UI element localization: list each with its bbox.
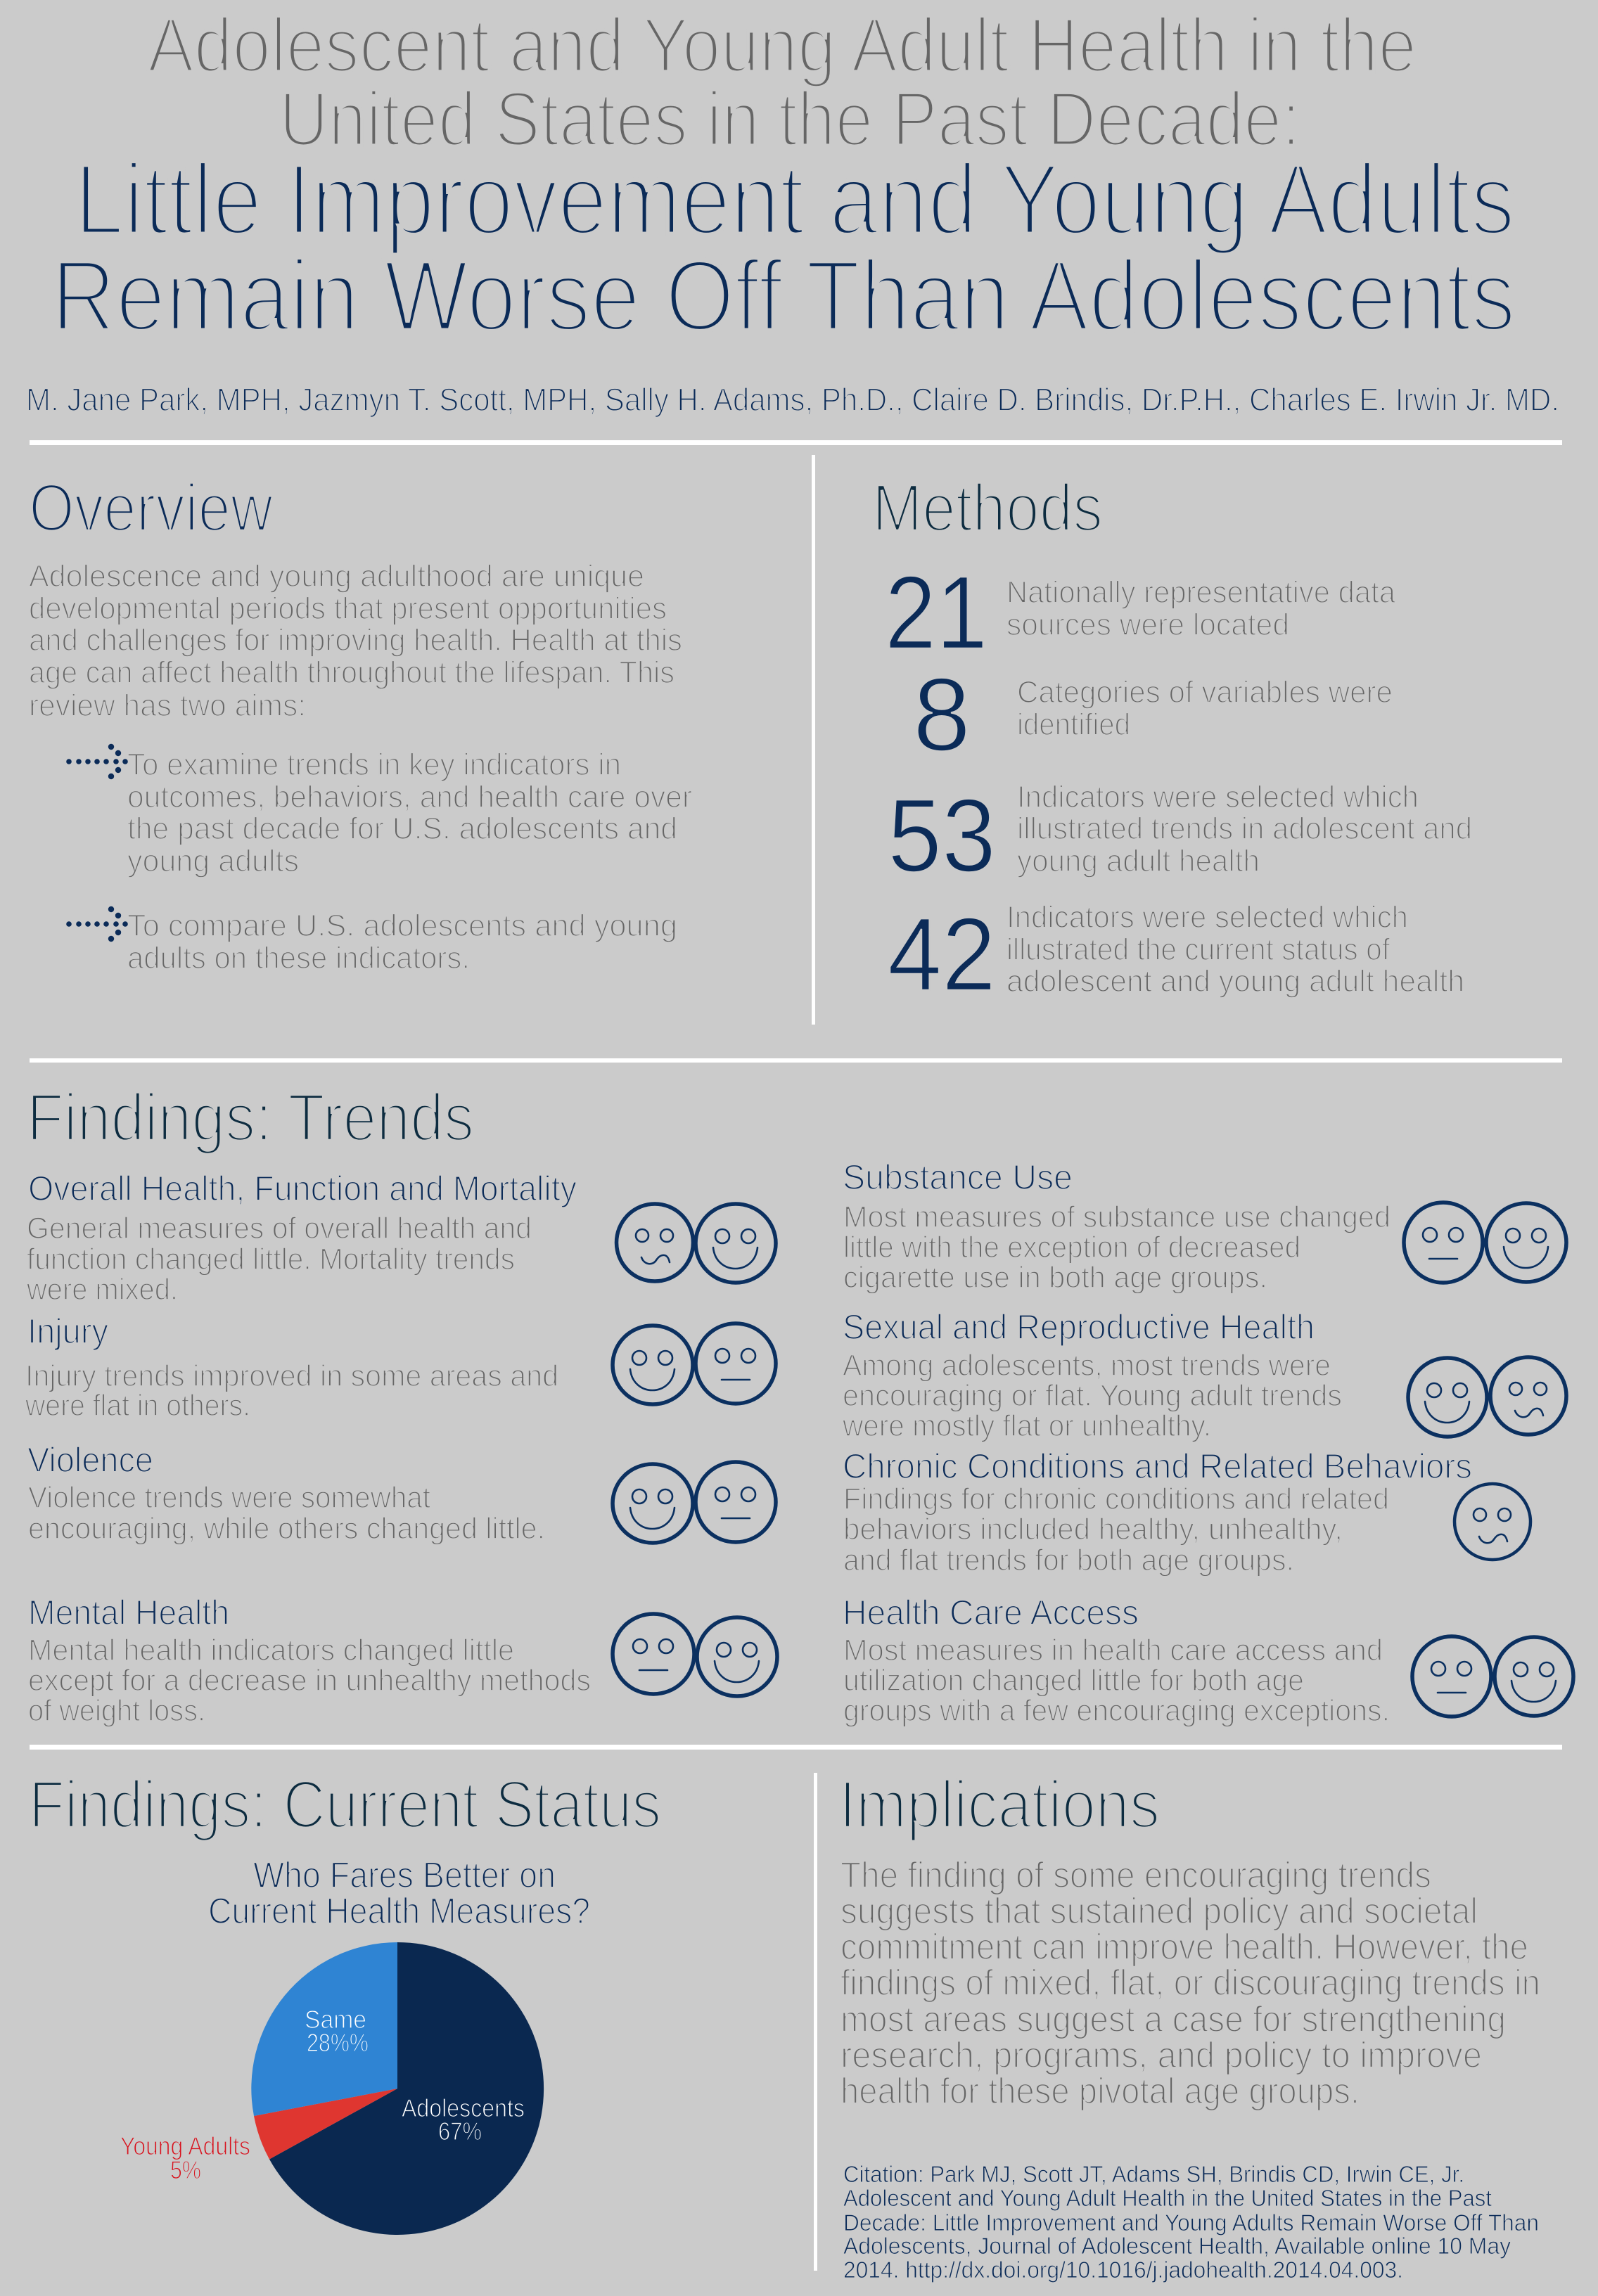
title: navy main bbox=[51, 143, 1516, 352]
slice: adolescents 67% bbox=[269, 1942, 544, 2235]
panel: overview bbox=[29, 470, 692, 975]
stat descriptions: Indicators were selected which bbox=[1006, 900, 1408, 935]
stat numbers bbox=[885, 555, 996, 1013]
text: mental health: Mental health indicators changed little bbox=[28, 1634, 514, 1667]
icon: happy face bbox=[1408, 1358, 1487, 1437]
text: injury bbox=[25, 1359, 558, 1423]
text: violence: Violence trends were somewhat bbox=[28, 1481, 430, 1515]
heading: methods: Methods bbox=[872, 470, 1103, 546]
text: chronic conditions: Findings for chronic conditions and related bbox=[843, 1482, 1389, 1516]
icon: happy face bbox=[613, 1326, 693, 1404]
text: violence bbox=[28, 1481, 545, 1546]
stat descriptions: illustrated the current status of bbox=[1006, 932, 1391, 967]
aim 2 text: adults on these indicators. bbox=[127, 941, 470, 975]
slice: young adults 5% bbox=[254, 2089, 397, 2159]
text: sexual and reproductive health: Among adolescents, most trends were bbox=[843, 1349, 1331, 1383]
implications paragraph bbox=[840, 1855, 1540, 2112]
label: same bbox=[305, 2005, 369, 2057]
icon: neutral face bbox=[696, 1462, 776, 1542]
citation: Citation: Park MJ, Scott JT, Adams SH, Brindis CD, Irwin CE, Jr. bbox=[843, 2161, 1464, 2187]
title: grey lead bbox=[148, 2, 1417, 162]
panel: findings current status bbox=[29, 1767, 661, 2235]
text: health care access: Most measures in health care access and bbox=[843, 1634, 1383, 1667]
implications paragraph: The finding of some encouraging trends bbox=[840, 1855, 1431, 1896]
icon: happy face bbox=[697, 1617, 777, 1696]
label: young adults bbox=[120, 2131, 250, 2184]
panel: findings trends bbox=[25, 1080, 1573, 1728]
text: overall health: General measures of overall health and bbox=[27, 1212, 532, 1245]
text: mental health: of weight loss. bbox=[28, 1694, 205, 1728]
implications paragraph: suggests that sustained policy and societal bbox=[840, 1891, 1478, 1932]
label: young adults: 5% bbox=[170, 2155, 201, 2184]
stat descriptions: sources were located bbox=[1006, 608, 1289, 642]
stat numbers: 53 bbox=[888, 778, 996, 894]
stat descriptions: Categories of variables were bbox=[1017, 675, 1393, 710]
citation: Adolescents, Journal of Adolescent Health, Available online 10 May bbox=[843, 2233, 1511, 2259]
text: health care access bbox=[843, 1634, 1390, 1728]
stat descriptions: Nationally representative data bbox=[1006, 575, 1395, 610]
citation: 2014. http://dx.doi.org/10.1016/j.jadohealth.2014.04.003. bbox=[843, 2257, 1403, 2283]
icon: sad face bbox=[1490, 1357, 1566, 1435]
panel: implications bbox=[839, 1767, 1540, 2283]
text: substance use bbox=[843, 1200, 1391, 1295]
subheading: substance use: Substance Use bbox=[843, 1157, 1073, 1197]
text: overall health: function changed little. Mortality trends bbox=[27, 1243, 515, 1276]
stat numbers: 8 bbox=[913, 657, 971, 773]
icon: wavy face bbox=[616, 1204, 693, 1281]
text: injury: Injury trends improved in some areas and bbox=[25, 1359, 558, 1393]
overview paragraph: age can affect health throughout the lifespan. This bbox=[29, 655, 675, 690]
stat descriptions: young adult health bbox=[1017, 844, 1260, 878]
icon: happy face bbox=[696, 1204, 776, 1283]
implications paragraph: most areas suggest a case for strengthening bbox=[840, 1999, 1506, 2040]
text: mental health: except for a decrease in unhealthy methods bbox=[28, 1664, 591, 1698]
chart title bbox=[208, 1855, 590, 1932]
text: overall health: were mixed. bbox=[26, 1273, 178, 1307]
chart title: Current Health Measures? bbox=[208, 1891, 590, 1932]
icon: happy face bbox=[613, 1464, 693, 1543]
stat descriptions bbox=[1006, 575, 1472, 999]
title bbox=[51, 2, 1516, 352]
title: grey lead: United States in the Past Decade: bbox=[279, 76, 1300, 162]
text: chronic conditions bbox=[843, 1482, 1389, 1577]
stat numbers: 42 bbox=[888, 897, 996, 1013]
subheading: chronic conditions: Chronic Conditions and Related Behaviors bbox=[843, 1447, 1472, 1486]
text: mental health bbox=[28, 1634, 591, 1728]
title: grey lead: Adolescent and Young Adult Health in the bbox=[148, 2, 1417, 89]
text: substance use: cigarette use in both age groups. bbox=[843, 1261, 1267, 1295]
label: adolescents: Adolescents bbox=[402, 2093, 525, 2122]
subheading: injury: Injury bbox=[27, 1311, 108, 1351]
text: injury: were flat in others. bbox=[25, 1389, 250, 1423]
subheading: health care access: Health Care Access bbox=[843, 1593, 1139, 1632]
aim 1 text: young adults bbox=[127, 844, 299, 878]
aim 2 text: To compare U.S. adolescents and young bbox=[127, 909, 677, 943]
text: substance use: Most measures of substance use changed bbox=[843, 1200, 1391, 1234]
label: same: 28%% bbox=[307, 2028, 369, 2057]
icon: neutral face bbox=[1404, 1202, 1483, 1283]
implications paragraph: health for these pivotal age groups. bbox=[840, 2071, 1360, 2112]
text: sexual and reproductive health: encouraging or flat. Young adult trends bbox=[843, 1379, 1342, 1413]
implications paragraph: research, programs, and policy to improve bbox=[840, 2035, 1482, 2076]
text: substance use: little with the exception of decreased bbox=[843, 1231, 1300, 1264]
subheading: sexual and reproductive health: Sexual and Reproductive Health bbox=[843, 1307, 1315, 1347]
subheading: mental health: Mental Health bbox=[28, 1593, 229, 1632]
text: sexual and reproductive health: were mostly flat or unhealthy. bbox=[842, 1409, 1211, 1443]
stat descriptions: adolescent and young adult health bbox=[1006, 964, 1464, 999]
citation: Decade: Little Improvement and Young Adults Remain Worse Off Than bbox=[843, 2210, 1539, 2236]
overview paragraph bbox=[29, 559, 682, 723]
icon: happy face bbox=[1495, 1637, 1573, 1716]
subheading: violence: Violence bbox=[27, 1440, 153, 1480]
label: young adults: Young Adults bbox=[120, 2131, 250, 2160]
icon: neutral face bbox=[696, 1323, 776, 1404]
heading: findings trends: Findings: Trends bbox=[27, 1080, 474, 1155]
implications paragraph: findings of mixed, flat, or discouraging trends in bbox=[840, 1963, 1540, 2003]
text: health care access: utilization changed little for both age bbox=[843, 1664, 1304, 1698]
icon: happy face bbox=[1486, 1203, 1566, 1282]
heading: findings current status: Findings: Current Status bbox=[29, 1767, 661, 1842]
text: violence: encouraging, while others changed little. bbox=[28, 1512, 545, 1546]
label: adolescents: 67% bbox=[438, 2117, 482, 2146]
panel: methods bbox=[872, 470, 1472, 1013]
stat descriptions: Indicators were selected which bbox=[1017, 780, 1419, 814]
stat descriptions: illustrated trends in adolescent and bbox=[1017, 812, 1472, 846]
aim 1 text: outcomes, behaviors, and health care over bbox=[127, 780, 692, 814]
icon: dotted arrow 1 bbox=[66, 744, 128, 779]
aim 1 text: the past decade for U.S. adolescents and bbox=[127, 812, 677, 846]
aim 2 text bbox=[127, 909, 677, 975]
slice: same 28% bbox=[251, 1942, 397, 2116]
text: chronic conditions: behaviors included healthy, unhealthy, bbox=[843, 1513, 1343, 1546]
chart title: Who Fares Better on bbox=[253, 1855, 556, 1896]
icon: sad face bbox=[1455, 1484, 1530, 1560]
citation bbox=[843, 2161, 1539, 2283]
icon: neutral face bbox=[613, 1614, 694, 1694]
stat descriptions: identified bbox=[1017, 707, 1130, 742]
heading: implications: Implications bbox=[839, 1767, 1160, 1842]
label: adolescents bbox=[402, 2093, 525, 2146]
heading: overview: Overview bbox=[29, 470, 274, 546]
label: same: Same bbox=[305, 2005, 366, 2034]
aim 1 text bbox=[127, 748, 692, 878]
aim 1 text: To examine trends in key indicators in bbox=[127, 748, 621, 782]
icon: neutral face bbox=[1412, 1636, 1491, 1717]
text: sexual and reproductive health bbox=[842, 1349, 1342, 1443]
overview paragraph: Adolescence and young adulthood are unique bbox=[29, 559, 644, 594]
pie chart bbox=[120, 1942, 544, 2235]
text: chronic conditions: and flat trends for both age groups. bbox=[843, 1544, 1294, 1577]
overview paragraph: review has two aims: bbox=[29, 688, 306, 723]
text: overall health bbox=[26, 1212, 532, 1307]
overview paragraph: developmental periods that present opportunities bbox=[29, 591, 667, 626]
text: health care access: groups with a few encouraging exceptions. bbox=[843, 1694, 1390, 1728]
stat numbers: 21 bbox=[885, 555, 987, 671]
implications paragraph: commitment can improve health. However, the bbox=[840, 1927, 1528, 1968]
overview paragraph: and challenges for improving health. Health at this bbox=[29, 623, 682, 658]
icon: dotted arrow 2 bbox=[66, 906, 128, 942]
subheading: overall health: Overall Health, Function and Mortality bbox=[28, 1169, 577, 1208]
citation: Adolescent and Young Adult Health in the United States in the Past bbox=[843, 2185, 1492, 2211]
